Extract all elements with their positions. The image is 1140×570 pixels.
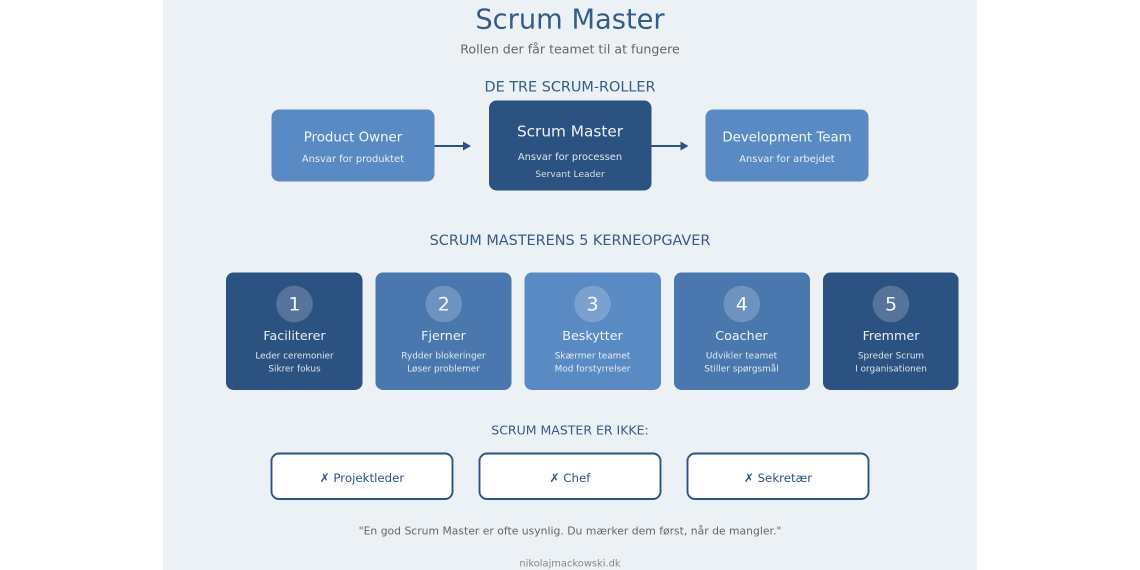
panel: three roles <box>272 100 868 190</box>
card: 1 faciliterer: Sikrer fokus <box>268 365 321 375</box>
panel: not list <box>272 454 868 499</box>
card: 3 beskytter <box>524 272 661 390</box>
box: projektleder <box>272 454 452 499</box>
card: 2 fjerner: Fjerner <box>421 328 467 343</box>
panel: five core tasks <box>226 272 958 390</box>
footer: nikolajmackowski.dk <box>519 559 621 570</box>
card: scrum master: Scrum Master <box>517 122 624 140</box>
icon: number 1: 1 <box>288 294 301 316</box>
card: 5 fremmer: Spreder Scrum <box>858 351 924 361</box>
heading: er ikke: SCRUM MASTER ER IKKE: <box>491 423 649 438</box>
card: 3 beskytter: Skærmer teamet <box>555 351 631 361</box>
card: product owner <box>272 110 434 182</box>
arrow: product owner to scrum master <box>434 142 471 150</box>
card: 3 beskytter: Mod forstyrrelser <box>555 365 631 375</box>
card: 2 fjerner <box>376 272 512 390</box>
box: sekretaer: ✗ Sekretær <box>744 471 812 485</box>
heading: de tre scrum-roller: DE TRE SCRUM-ROLLER <box>485 80 655 96</box>
heading: kerneopgaver: SCRUM MASTERENS 5 KERNEOPGAVER <box>430 233 710 249</box>
card: 4 coacher <box>674 272 810 390</box>
card: development team: Development Team <box>722 130 852 146</box>
quote: "En god Scrum Master er ofte usynlig. Du mærker dem først, når de mangler." <box>359 524 781 538</box>
card: 1 faciliterer: Leder ceremonier <box>255 351 334 361</box>
card: 1 faciliterer: Faciliterer <box>263 328 326 343</box>
card: 3 beskytter: Beskytter <box>562 328 624 343</box>
arrow: scrum master to development team <box>652 142 688 150</box>
box: chef: ✗ Chef <box>550 471 591 485</box>
box: projektleder: ✗ Projektleder <box>320 471 404 485</box>
box: chef <box>480 454 660 499</box>
card: 4 coacher: Stiller spørgsmål <box>704 364 779 375</box>
card: 4 coacher: Udvikler teamet <box>706 351 778 361</box>
card: 5 fremmer: Fremmer <box>863 328 920 343</box>
card: development team <box>706 110 868 182</box>
card: product owner: Product Owner <box>304 130 403 146</box>
card: 4 coacher: Coacher <box>715 328 769 343</box>
card: scrum master <box>489 100 652 190</box>
icon: number 5: 5 <box>885 294 897 316</box>
box: sekretaer <box>688 454 868 499</box>
card: product owner: Ansvar for produktet <box>302 154 404 165</box>
card: 2 fjerner: Rydder blokeringer <box>401 351 486 361</box>
title: Scrum Master <box>475 4 665 36</box>
subtitle: Rollen der får teamet til at fungere <box>460 42 680 56</box>
card: scrum master: Ansvar for processen <box>518 152 622 163</box>
card: 5 fremmer <box>823 272 958 390</box>
card: development team: Ansvar for arbejdet <box>739 154 835 165</box>
card: 5 fremmer: I organisationen <box>855 365 927 375</box>
card: 1 faciliterer <box>226 272 362 390</box>
card: scrum master: Servant Leader <box>535 170 605 180</box>
card: 2 fjerner: Løser problemer <box>407 365 480 375</box>
icon: number 4: 4 <box>736 294 748 316</box>
icon: number 2: 2 <box>438 294 450 316</box>
icon: number 3: 3 <box>586 294 599 316</box>
